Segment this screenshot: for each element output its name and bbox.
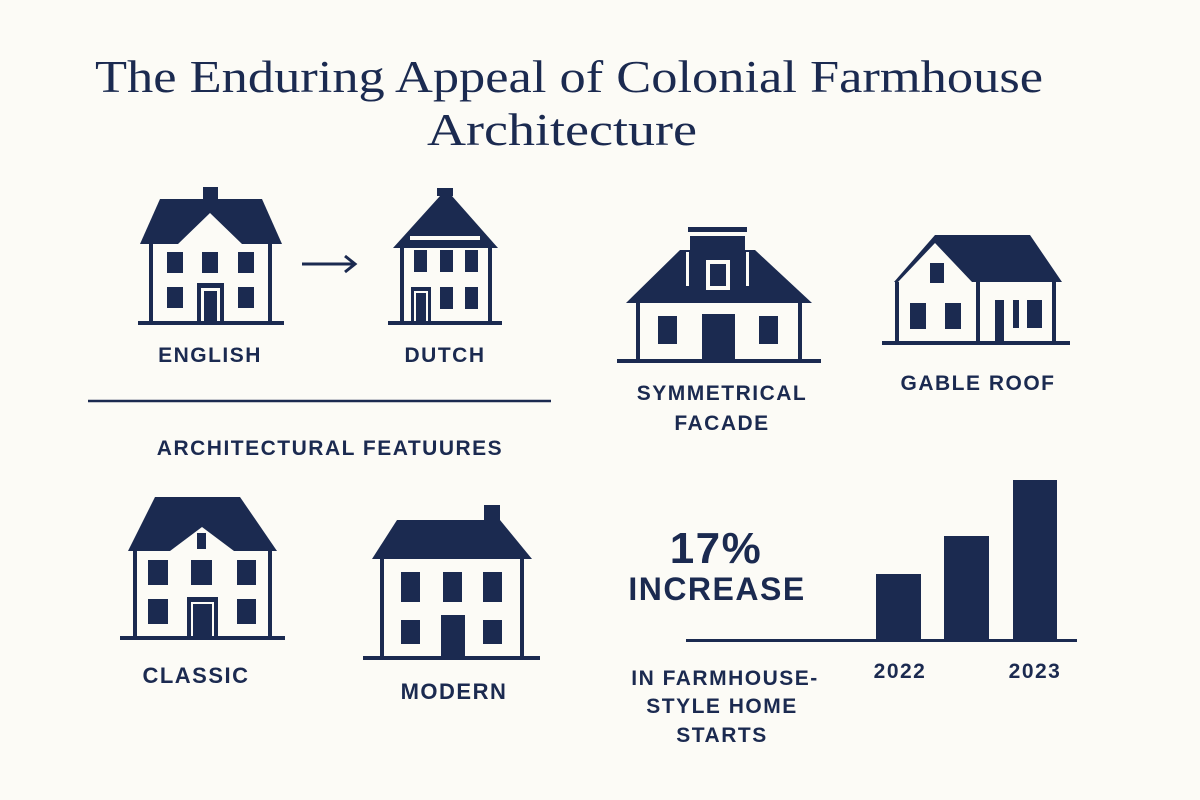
heading: architectural features: ARCHITECTURAL FEATUURES [157,437,503,460]
icon: modern house [363,505,540,660]
title [95,52,1043,155]
stat: 17% increase: 17% [670,524,762,573]
stat: 17% increase [628,524,806,607]
title: Architecture [427,105,697,155]
bar chart: 2022 [874,660,926,683]
label: symmetrical facade: FACADE [674,412,770,435]
label: symmetrical facade: SYMMETRICAL [637,382,807,405]
label: dutch: DUTCH [404,344,486,367]
icon: dutch house [388,188,502,325]
bar chart [686,480,1077,683]
icon: symmetrical house [617,227,821,363]
label: classic: CLASSIC [142,663,250,688]
title: The Enduring Appeal of Colonial Farmhouse [95,52,1043,102]
label: english: ENGLISH [158,344,262,367]
stat: 17% increase: INCREASE [628,571,806,607]
label: modern: MODERN [401,679,507,704]
stat caption: STARTS [676,724,768,747]
stat caption: STYLE HOME [646,695,798,718]
bar chart: 2023 [1009,660,1061,683]
icon: classic house [120,497,285,640]
icon: gable house [882,235,1070,345]
icon: english house [138,187,284,325]
label: symmetrical facade [637,382,807,435]
arrow [302,256,355,272]
stat caption: IN FARMHOUSE- [631,667,819,690]
label: gable roof: GABLE ROOF [900,372,1056,395]
stat caption [631,667,819,747]
